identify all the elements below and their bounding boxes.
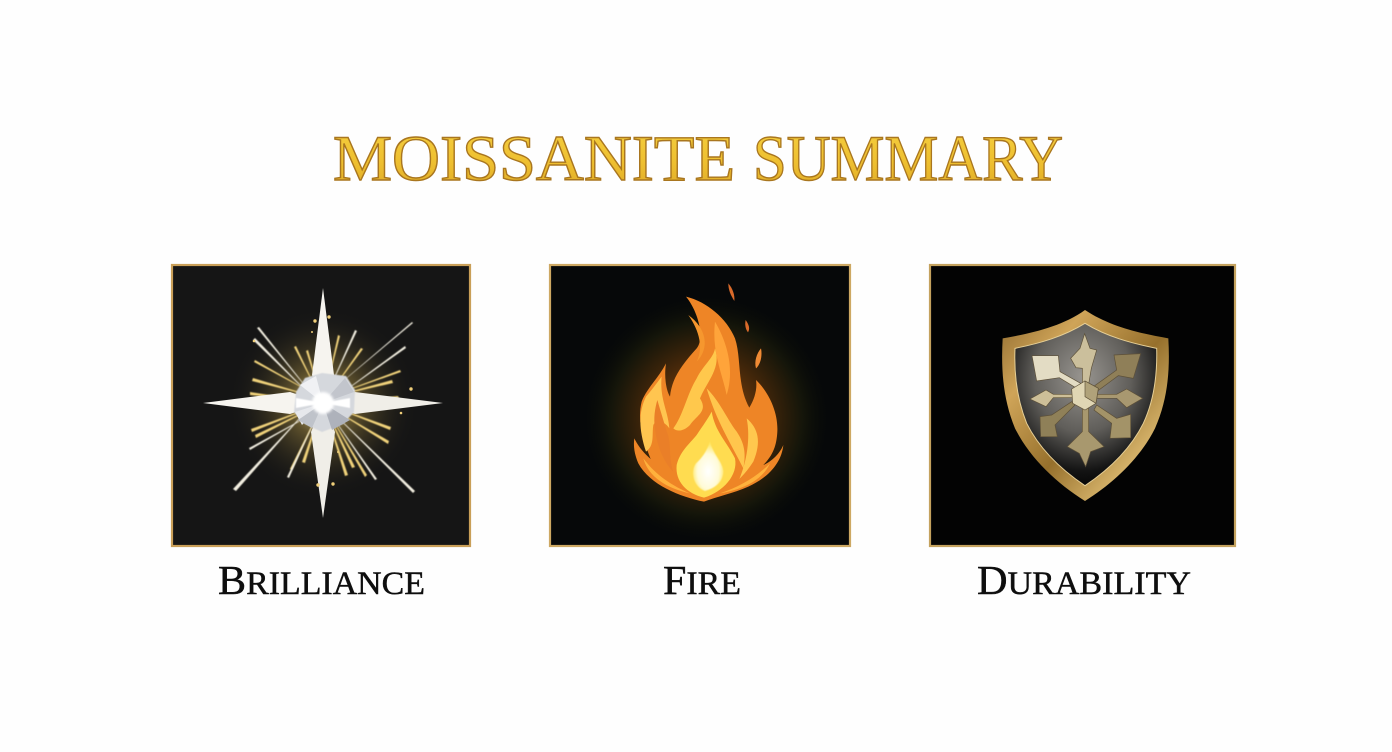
icon: snowflake: [1030, 334, 1143, 467]
title: [333, 123, 1063, 195]
title: SUMMARY: [753, 123, 1063, 195]
embers: [728, 283, 762, 368]
icon: flame: [583, 283, 830, 542]
panel frame: fire: [550, 265, 850, 546]
panel frame: durability: [930, 265, 1235, 546]
panel frame: brilliance: [172, 265, 470, 546]
title: MOISSANITE: [333, 123, 735, 195]
icon: brilliant star: [203, 288, 443, 518]
label: fire: FIRE: [663, 557, 741, 603]
label: brilliance: BRILLIANCE: [218, 557, 425, 603]
icon: shield: [1002, 310, 1169, 501]
panel: brilliance: [172, 265, 470, 546]
panel: fire: [550, 265, 850, 546]
label: durability: DURABILITY: [977, 557, 1191, 603]
panel: durability: [930, 265, 1235, 546]
sparkles: [253, 315, 413, 487]
